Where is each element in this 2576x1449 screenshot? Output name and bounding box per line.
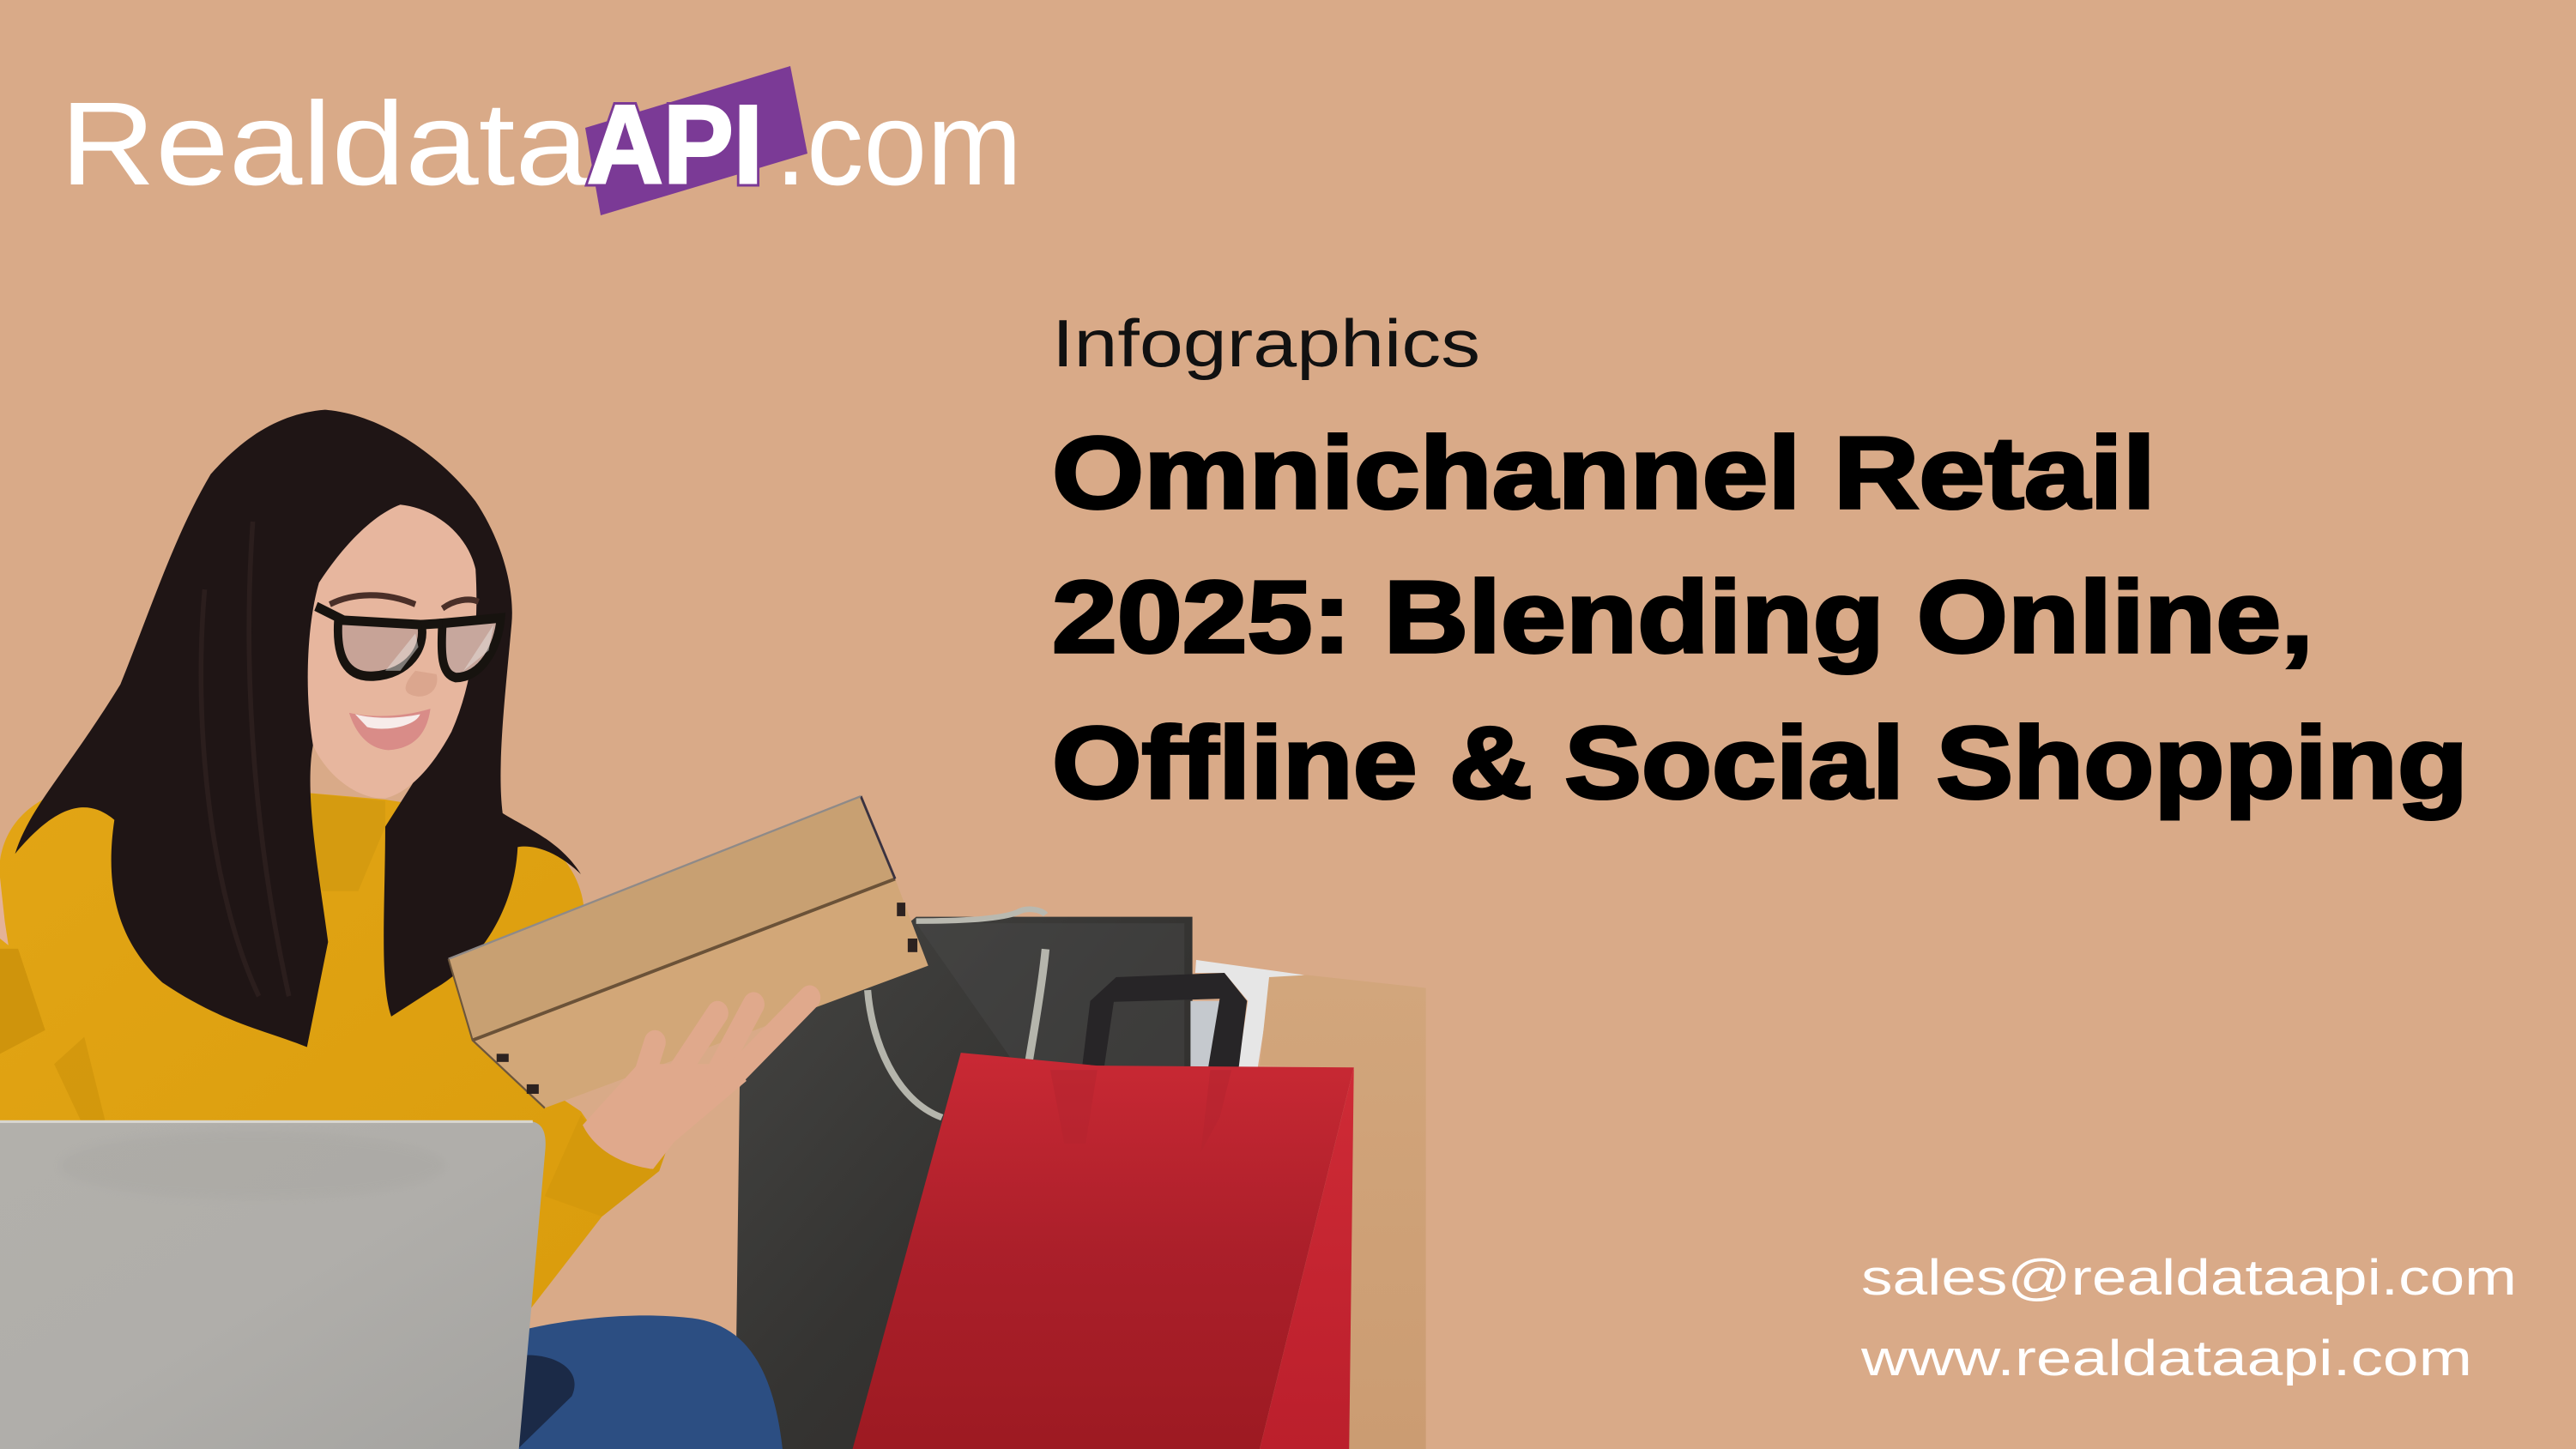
hair <box>15 410 581 1047</box>
logo: RealdataAPI.com <box>60 66 1022 215</box>
red bag side <box>1260 1067 1354 1449</box>
logo text: API: API <box>587 82 763 207</box>
shopping bags <box>735 909 1426 1449</box>
logo text: .com: .com <box>775 78 1022 210</box>
woman with laptop and parcel <box>0 410 928 1449</box>
white insert sheet <box>1190 960 1304 1070</box>
yellow sweater <box>0 786 669 1312</box>
left hand sliver <box>0 878 9 945</box>
hand holding parcel <box>583 998 810 1169</box>
email: sales@realdataapi.com <box>1861 1250 2517 1306</box>
kraft paper bag <box>1260 975 1426 1449</box>
contact details <box>1860 1250 2517 1386</box>
bag handle <box>1082 973 1247 1069</box>
glasses <box>316 607 501 678</box>
eyebrows <box>330 595 479 608</box>
red bag handle creases <box>1050 1070 1231 1152</box>
logo text: API: API <box>587 82 763 207</box>
black shopping bag <box>735 909 1193 1449</box>
red bag front <box>853 1053 1354 1449</box>
nose shadow <box>406 671 437 697</box>
logo text: Realdata: Realdata <box>60 78 589 210</box>
title line 2: 2025: Blending Online, <box>1052 560 2313 674</box>
logo purple badge <box>585 66 807 215</box>
label: Infographics: Infographics <box>1052 305 1480 381</box>
face <box>308 504 476 798</box>
title line 1: Omnichannel Retail <box>1052 416 2156 530</box>
smile <box>349 709 431 750</box>
laptop <box>0 1120 546 1449</box>
title <box>1052 416 2468 820</box>
website: www.realdataapi.com <box>1860 1331 2472 1386</box>
jeans <box>475 1315 783 1449</box>
cardboard parcel <box>449 796 928 1108</box>
title line 3: Offline & Social Shopping <box>1052 706 2468 820</box>
